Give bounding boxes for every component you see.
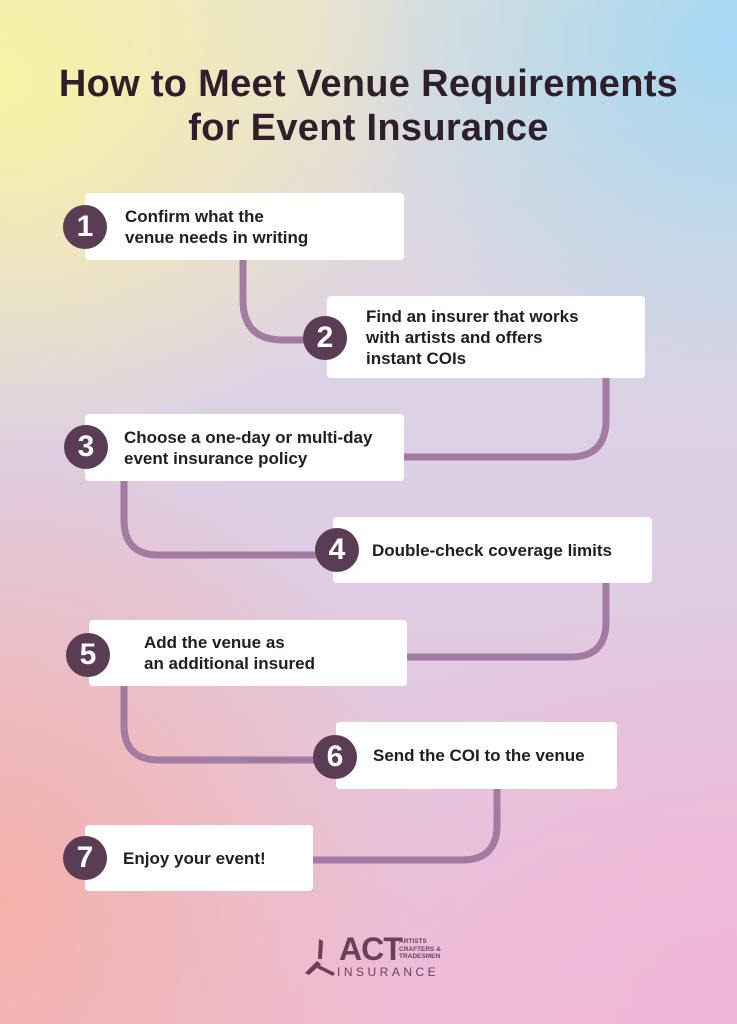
step 7 [85,825,313,891]
badge 4 [315,528,359,572]
logo: ARTISTS [399,938,427,945]
step 6: Send the COI to the venue [373,746,585,765]
step 6 [336,722,617,789]
step 1: Confirm what the [125,206,264,226]
logo icon [305,939,335,976]
badge 5 [66,633,110,677]
step 5: an additional insured [144,654,315,673]
title: How to Meet Venue Requirements [59,63,678,105]
step 2: instant COIs [366,348,466,368]
logo text: ACT [339,931,402,967]
step 3: Choose a one-day or multi-day [124,428,372,446]
logo: INSURANCE [337,965,439,979]
step 4 [333,517,652,583]
step 2 [327,296,645,378]
step 5 [89,620,407,686]
logo: TRADESMEN [399,953,440,960]
step 2: Find an insurer that works [366,306,579,326]
step 4: Double-check coverage limits [372,540,612,560]
badge 7 [63,836,107,880]
title: for Event Insurance [188,107,549,149]
badge 1: 1 [77,210,93,243]
badge 1 [63,205,107,249]
step 3: event insurance policy [124,448,307,468]
badge 6 [313,735,357,779]
logo: CRAFTERS & [399,946,441,952]
title [59,63,678,149]
step 3 [85,414,404,481]
step 5: Add the venue as [144,633,285,652]
badge 7: 7 [77,841,93,874]
step 1 [85,193,404,260]
badge 3 [64,425,108,469]
badge 3: 3 [78,430,94,463]
step 2: with artists and offers [366,328,543,346]
badge 5: 5 [80,638,96,671]
badge 6: 6 [327,740,343,773]
step 7: Enjoy your event! [123,848,266,868]
step 1: venue needs in writing [125,228,308,246]
badge 2 [303,316,347,360]
logo [305,931,441,979]
badge 4: 4 [329,533,345,566]
badge 2: 2 [317,321,333,354]
